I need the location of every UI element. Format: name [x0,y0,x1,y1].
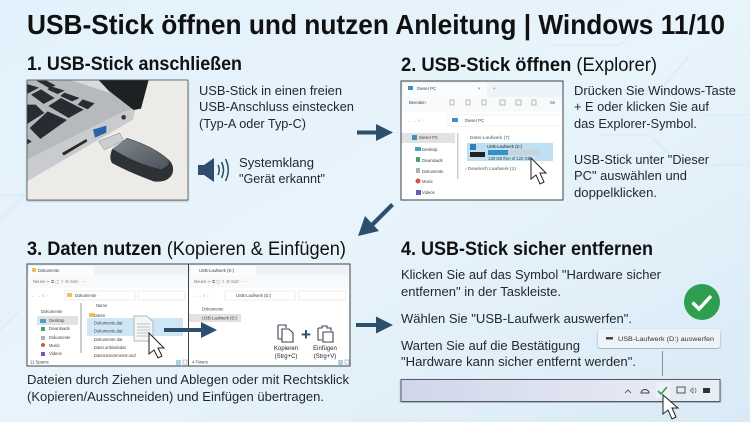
text: click symbol [401,268,661,299]
cursor [663,395,678,419]
heading: step 1: 1. USB-Stick anschließen [27,54,242,75]
screenshot: source window: Datei.unbindedat [94,345,127,350]
screenshot: source window: 11 Spams [30,360,49,364]
icon: document [134,316,153,341]
screenshot: explorer: Dokumente [422,169,444,174]
window frame [401,81,563,200]
text: wait: Warten Sie auf die Bestätigung [401,339,580,353]
label: paste: Einfügen [313,346,337,352]
screenshot: source window: Dokumente [75,293,97,298]
screenshot: source window: Videos [49,351,62,356]
screenshot: source window: Dokumente [49,335,71,340]
text: click symbol: entfernen" in der Taskleiste. [401,285,561,299]
arrow: step 1 to 2 [357,124,393,141]
screenshot: explorer: Videos [422,190,435,195]
panel: step 1 [27,54,354,201]
screenshot: explorer: ← → ∨ ↑ [407,118,424,123]
screenshot: target window: USB-Laufwerk (D:) [199,268,235,273]
text: plug in: USB-Stick in einen freien [199,84,342,98]
screenshot: explorer: Beenden [409,100,426,105]
cursor [531,158,546,184]
popup: eject [598,329,720,348]
icon: speaker [198,158,228,182]
screenshot: explorer: + [493,86,496,91]
popup: eject: USB-Laufwerk (D:) auswerfen [618,336,714,343]
text: wait: "Hardware kann sicher entfernt werden". [401,355,636,369]
screenshot: target window: Neuen ✂ ⧉ ▢ ⇪ ☰ Sort · ··· [194,279,247,284]
text: system sound: Systemklang [239,156,314,170]
icon: copy [278,325,293,342]
text: wait [401,339,636,369]
text: drag and drop [27,373,350,404]
photo: USB stick at laptop [27,78,190,201]
window frames [27,264,350,366]
plus: + [301,325,311,344]
screenshot: source window: Downloads [49,326,70,331]
cursor [149,333,164,358]
screenshot: target window: ← → ∨ ↑ [192,293,209,298]
text: select stick [574,153,709,200]
screenshot: explorer: Se [550,100,556,105]
text: select stick: PC" auswählen und [574,169,687,183]
screenshot: source window: Dokumente [38,268,60,273]
screenshot: explorer: Dieser PC [419,135,438,140]
screenshot: source window: Dokumente.dat [94,320,123,326]
photo frame [27,80,188,200]
text: open explorer: Drücken Sie Windows-Taste [574,84,736,98]
panel: step 3 [27,239,350,404]
screenshot: target window: Dokumente [202,306,224,312]
icon: paste [318,326,333,342]
panel: step 2 [401,55,736,200]
screenshot: explorer: 138 GB free of 122 GB [488,156,531,161]
title: USB-Stick öffnen und nutzen Anleitung | Windows 11/10 [27,9,725,40]
text: drag and drop: (Kopieren/Ausschneiden) und Einfügen übertragen. [27,390,324,404]
screenshot: target window: 4 Fiwers [192,360,208,364]
heading: step 3: 3. Daten nutzen (Kopieren & Einfügen) [27,239,346,260]
screenshot: explorer: › Dewriech Laufwerk (1) [465,166,516,172]
screenshot: source window: Dokumente.dat [94,328,123,334]
icon: green check [684,284,720,320]
screenshot: source window: Daten [94,313,106,318]
screenshot: source window: Neuen ✂ ⧉ ▢ ⇪ ☰ Sort · ··· [33,279,86,284]
arrow: step 3 to 4 [356,316,393,334]
screenshot: explorer: Dieser PC [417,86,436,91]
tray icons [625,383,710,398]
text: drag and drop: Dateien durch Ziehen und Ablegen oder mit Rechtsklick [27,373,350,387]
screenshot: target window: USB-Laufwerk (D:) [236,293,272,298]
text: open explorer: + E oder klicken Sie auf [574,100,709,114]
text: system sound [239,156,325,186]
screenshot: explorer [401,81,564,200]
label: copy [274,346,298,360]
panel: step 4 [401,239,720,419]
text: plug in: (Typ-A oder Typ-C) [199,117,306,131]
screenshot: source window: ← → ∨ ↑ [31,293,48,298]
text: select stick: USB-Stick unter "Dieser [574,153,709,167]
screenshot: source window: Dokumente.dat [94,337,123,342]
label: paste: (Strg+V) [314,354,336,360]
taskbar [401,380,720,402]
text: open explorer: das Explorer-Symbol. [574,117,697,131]
text: open explorer [574,84,736,131]
screenshot: explorer: Music [422,179,433,184]
screenshot: target window: USB-Laufwerk (D:) [202,316,238,320]
screenshot: source window: Music [49,343,60,348]
screenshot: source window: Desktop [49,318,65,323]
text: click symbol: Klicken Sie auf das Symbol "Hardware sicher [401,268,661,282]
screenshot: source window: Dokumente [41,309,63,314]
screenshot: target window [189,264,350,366]
heading: step 2: 2. USB-Stick öffnen (Explorer) [401,55,657,76]
label: paste [313,346,337,360]
screenshot: source window: Dateizusammenst.und [94,353,136,358]
text: select stick: doppelklicken. [574,186,657,200]
screenshot: explorer: × [478,86,481,91]
arrow: step 2 to 3 [358,203,394,236]
label: copy: (Strg+C) [275,354,297,360]
screenshot: explorer: Datei-Laufwerk (7) [470,135,510,141]
text: plug in [199,84,354,131]
screenshot: explorer: Desktop [422,147,438,152]
screenshot: explorer: Downloads [422,158,443,163]
screenshot: source window: Name [96,303,108,308]
screenshot: source window [27,264,188,366]
screenshot: explorer: USB-Laufwerk (D:) [487,144,523,149]
text: plug in: USB-Anschluss einstecken [199,100,354,114]
label: copy: Kopieren [274,346,298,352]
screenshot: explorer: Dieser PC [465,118,484,123]
arrow: drag [164,322,217,338]
heading: step 4: 4. USB-Stick sicher entfernen [401,239,653,260]
text: system sound: "Gerät erkannt" [239,172,325,186]
text: eject: Wählen Sie "USB-Laufwerk auswerfen". [401,312,632,326]
